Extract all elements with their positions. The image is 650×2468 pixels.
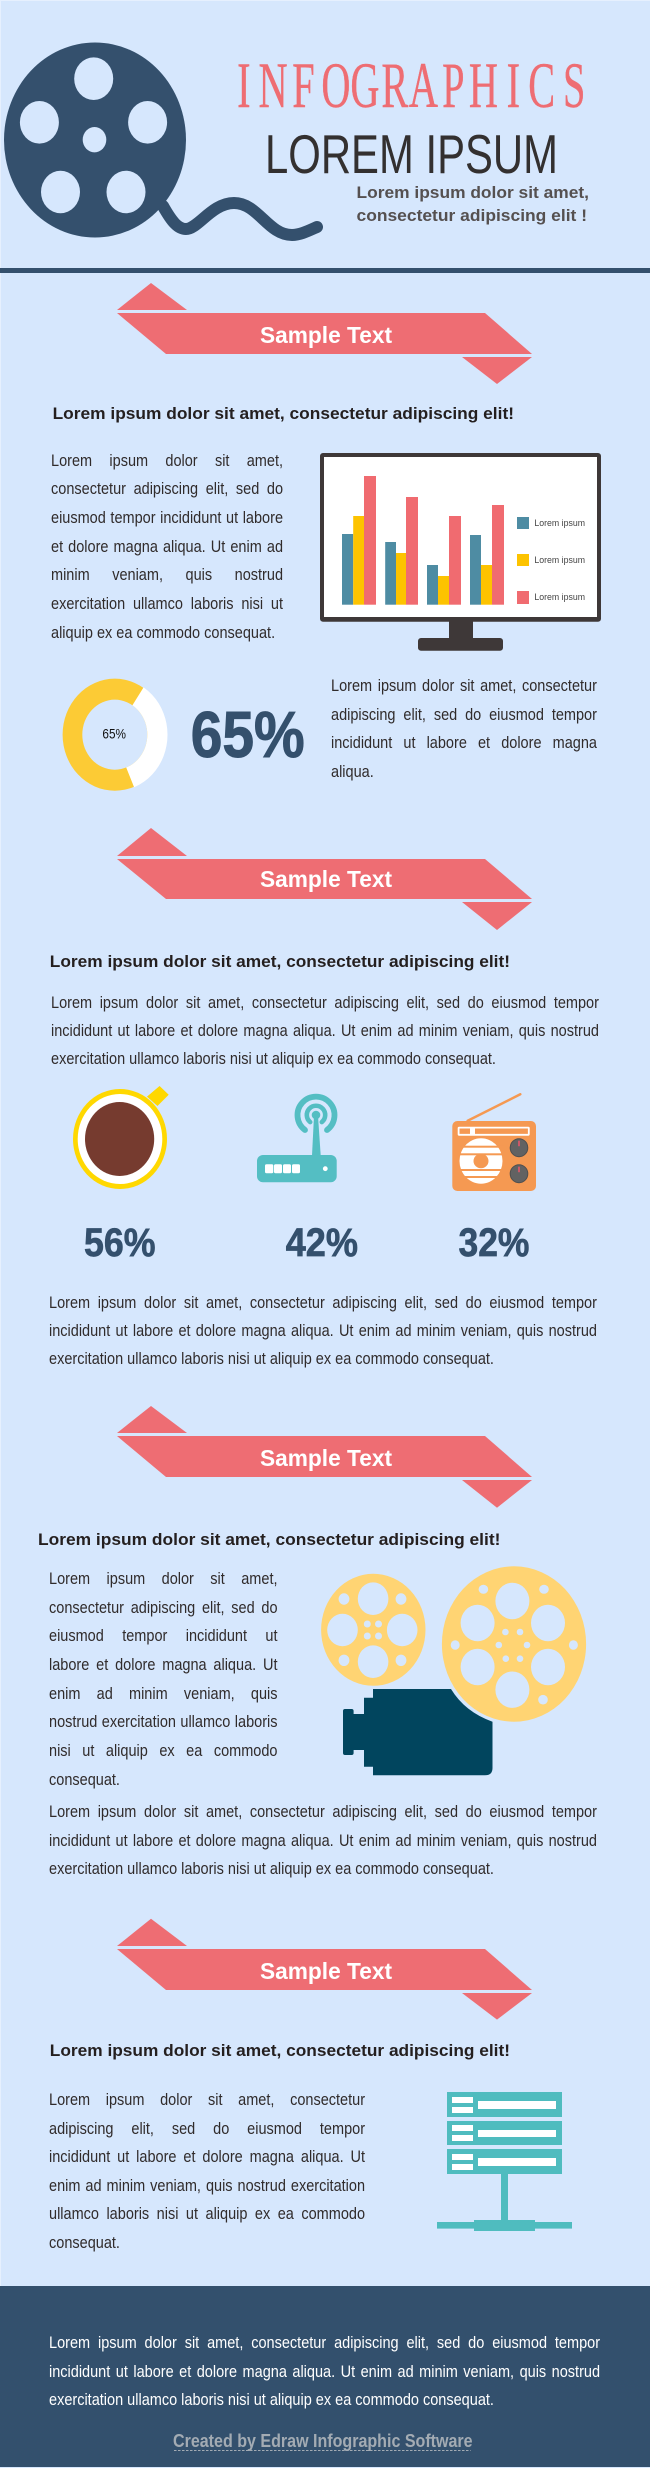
paragraph: beside projector: enim ad minim veniam, quis — [49, 1684, 278, 1703]
paragraph: beside 65% stat: aliqua. — [331, 762, 374, 781]
paragraph: beside projector: consectetur adipiscing elit, sed do — [49, 1598, 278, 1617]
paragraph: footer: incididunt ut labore et dolore magna aliqua. Ut enim ad minim veniam, quis nostrud — [49, 2362, 600, 2381]
paragraph: beside monitor: exercitation ullamco laboris nisi ut — [51, 594, 283, 613]
paragraph: beside 65% stat: adipiscing elit, sed do eiusmod tempor — [331, 705, 597, 724]
icon: coffee cup — [73, 1086, 169, 1189]
chart legend: Lorem ipsum — [534, 555, 585, 565]
paragraph: beside monitor — [51, 450, 283, 642]
paragraph: beside server — [49, 2090, 365, 2252]
chart legend: Lorem ipsum — [534, 592, 585, 602]
title: INFOGRAPHICS — [237, 49, 585, 121]
icon: radio — [452, 1094, 536, 1191]
paragraph: beside server: consequat. — [49, 2233, 120, 2252]
ribbon: section 3 — [117, 1406, 532, 1508]
paragraph: beside monitor: minim veniam, quis nostrud — [51, 565, 283, 584]
stat: 32%: 32% — [458, 1221, 529, 1265]
paragraph: footer: Lorem ipsum dolor sit amet, consectetur adipiscing elit, sed do eiusmod tempor — [49, 2333, 600, 2352]
small film reel — [321, 1574, 425, 1686]
paragraph: beside server: adipiscing elit, sed do eiusmod tempor — [49, 2119, 365, 2138]
stat: 42%: 42% — [286, 1221, 358, 1265]
paragraph: section 3 closing — [49, 1802, 597, 1878]
footer credit: Created by Edraw Infographic Software — [173, 2431, 473, 2451]
paragraph: beside monitor: Lorem ipsum dolor sit amet, — [51, 450, 283, 470]
paragraph: beside monitor: aliquip ex ea commodo consequat. — [51, 623, 275, 642]
ribbon: section 2 — [117, 828, 532, 930]
paragraph: section 2 intro: incididunt ut labore et dolore magna aliqua. Ut enim ad minim veniam, quis nostrud — [51, 1021, 599, 1040]
paragraph: section 2 intro — [51, 992, 599, 1068]
paragraph: section 3 closing: exercitation ullamco laboris nisi ut aliquip ex ea commodo consequat. — [49, 1859, 494, 1878]
paragraph: footer: exercitation ullamco laboris nisi ut aliquip ex ea commodo consequat. — [49, 2390, 494, 2409]
subtitle: lorem ipsum: LOREM IPSUM — [265, 123, 558, 185]
heading: section 4: Lorem ipsum dolor sit amet, consectetur adipiscing elit! — [50, 2041, 510, 2060]
paragraph: beside projector — [49, 1569, 278, 1789]
paragraph: beside monitor: eiusmod tempor incididunt ut labore — [51, 508, 283, 527]
paragraph: beside projector: labore et dolore magna aliqua. Ut — [49, 1655, 278, 1674]
paragraph: beside projector: nostrud exercitation ullamco laboris — [49, 1712, 278, 1731]
icon: server rack — [437, 2092, 572, 2231]
paragraph: footer — [49, 2333, 600, 2409]
paragraph: beside 65% stat — [331, 676, 597, 781]
ribbon: section 2: Sample Text — [260, 866, 392, 892]
paragraph: beside projector: Lorem ipsum dolor sit amet, — [49, 1569, 278, 1588]
tagline: Lorem ipsum dolor sit amet, — [356, 184, 589, 202]
tagline: consectetur adipiscing elit ! — [356, 207, 587, 225]
paragraph: beside projector: nisi ut aliquip ex ea commodo — [49, 1741, 278, 1760]
paragraph: section 2 intro: Lorem ipsum dolor sit amet, consectetur adipiscing elit, sed do eiusmod tempor — [51, 992, 599, 1012]
footer band — [0, 2286, 650, 2467]
icon: film reel — [4, 42, 317, 238]
large film reel — [442, 1566, 586, 1722]
projector body — [343, 1689, 492, 1775]
paragraph: section 2 closing: exercitation ullamco laboris nisi ut aliquip ex ea commodo consequat. — [49, 1349, 494, 1368]
paragraph: beside server: enim ad minim veniam, quis nostrud exercitation — [49, 2176, 365, 2195]
donut chart: 65%: 65% — [102, 727, 126, 742]
paragraph: beside monitor: consectetur adipiscing elit, sed do — [51, 479, 283, 498]
paragraph: section 3 closing: incididunt ut labore et dolore magna aliqua. Ut enim ad minim veniam, quis nostrud — [49, 1831, 597, 1850]
paragraph: section 2 intro: exercitation ullamco laboris nisi ut aliquip ex ea commodo consequat. — [51, 1049, 496, 1068]
paragraph: beside 65% stat: Lorem ipsum dolor sit amet, consectetur — [331, 676, 597, 695]
ribbon: section 4: Sample Text — [260, 1958, 392, 1984]
tagline — [356, 184, 589, 225]
icon: film projector — [321, 1566, 586, 1775]
ribbon: section 3: Sample Text — [260, 1445, 392, 1471]
stat: 56%: 56% — [84, 1221, 156, 1265]
heading: section 2: Lorem ipsum dolor sit amet, consectetur adipiscing elit! — [50, 952, 510, 971]
paragraph: section 2 closing: Lorem ipsum dolor sit amet, consectetur adipiscing elit, sed do eiusmod tempor — [49, 1293, 597, 1312]
chart legend: Lorem ipsum — [534, 518, 585, 528]
header divider — [0, 268, 650, 273]
heading: section 3: Lorem ipsum dolor sit amet, consectetur adipiscing elit! — [38, 1530, 500, 1549]
donut chart: 65% — [62, 678, 168, 791]
paragraph: beside server: Lorem ipsum dolor sit amet, consectetur — [49, 2090, 365, 2109]
icon: monitor with bar chart — [320, 453, 601, 651]
paragraph: beside 65% stat: incididunt ut labore et dolore magna — [331, 733, 597, 752]
paragraph: beside server: ullamco laboris nisi ut aliquip ex ea commodo — [49, 2204, 365, 2223]
paragraph: beside monitor: et dolore magna aliqua. Ut enim ad — [51, 537, 283, 556]
heading: section 1: Lorem ipsum dolor sit amet, consectetur adipiscing elit! — [53, 404, 514, 423]
ribbon: section 4 — [117, 1919, 532, 2020]
ribbon: section 1: Sample Text — [260, 322, 392, 348]
paragraph: beside server: incididunt ut labore et dolore magna aliqua. Ut — [49, 2147, 365, 2166]
paragraph: beside projector: consequat. — [49, 1770, 120, 1789]
paragraph: beside projector: eiusmod tempor incididunt ut — [49, 1626, 278, 1645]
icon: wifi router — [257, 1097, 337, 1182]
stat: 65%: 65% — [191, 698, 305, 771]
paragraph: section 2 closing — [49, 1293, 597, 1368]
chart legend — [517, 517, 585, 604]
paragraph: section 3 closing: Lorem ipsum dolor sit amet, consectetur adipiscing elit, sed do eiusmod tempor — [49, 1802, 597, 1821]
bar chart — [342, 476, 504, 605]
paragraph: section 2 closing: incididunt ut labore et dolore magna aliqua. Ut enim ad minim veniam, quis nostrud — [49, 1321, 597, 1340]
ribbon: section 1 — [117, 283, 532, 384]
